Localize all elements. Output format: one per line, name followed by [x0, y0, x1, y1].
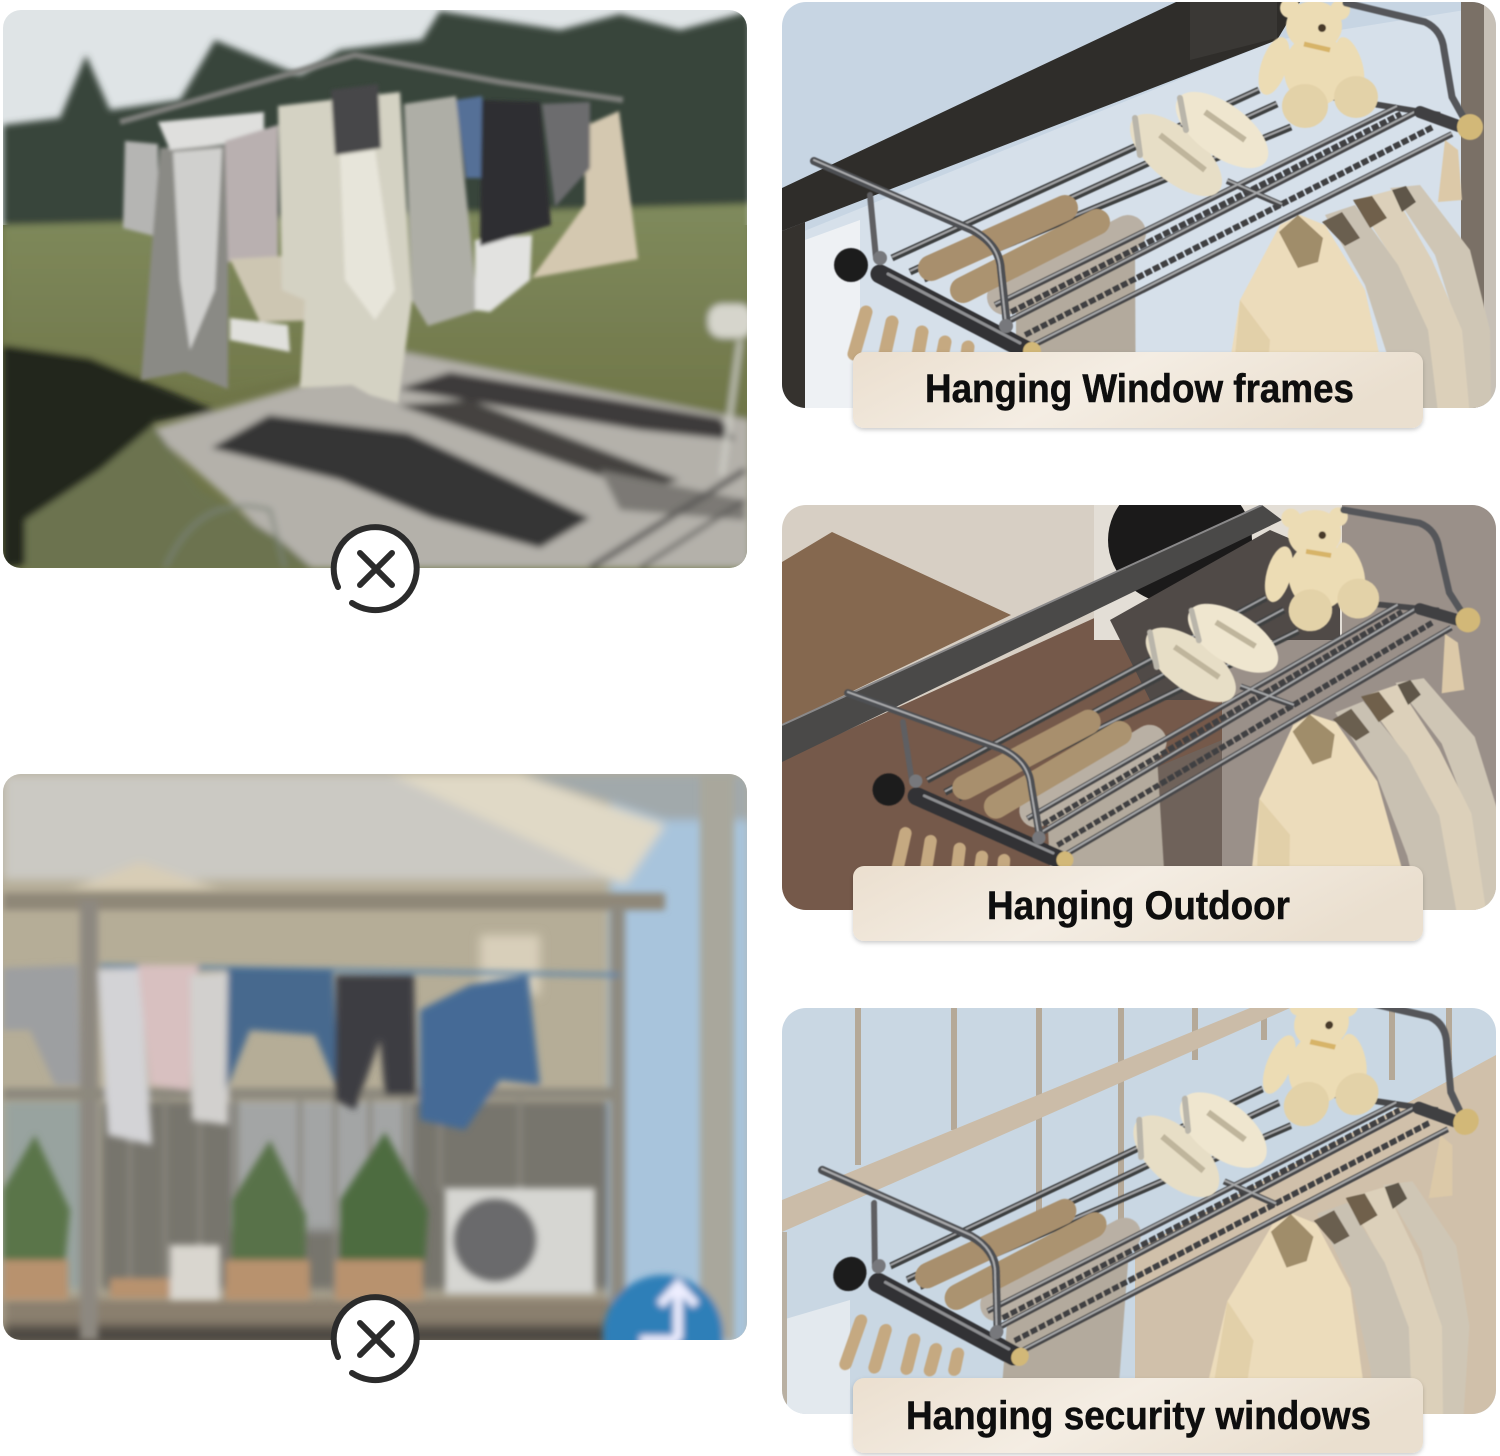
panel: blurred garden laundry photo	[3, 10, 753, 568]
panel: rack on outdoor rail	[782, 505, 1496, 910]
label: Hanging Outdoor	[853, 866, 1423, 941]
label: Hanging Window frames	[853, 352, 1423, 428]
panel: blurred balcony laundry photo	[3, 774, 750, 1395]
icon: cross badge bottom	[334, 1297, 418, 1380]
icon: cross badge top	[334, 527, 418, 610]
panel: rack on window frame	[782, 2, 1496, 408]
label: Hanging security windows	[853, 1378, 1423, 1453]
label: Hanging security windows: Hanging security windows	[906, 1394, 1371, 1438]
panel: rack on security window	[782, 1008, 1496, 1414]
label: Hanging Outdoor: Hanging Outdoor	[987, 884, 1290, 928]
label: Hanging Window frames: Hanging Window frames	[925, 367, 1354, 411]
